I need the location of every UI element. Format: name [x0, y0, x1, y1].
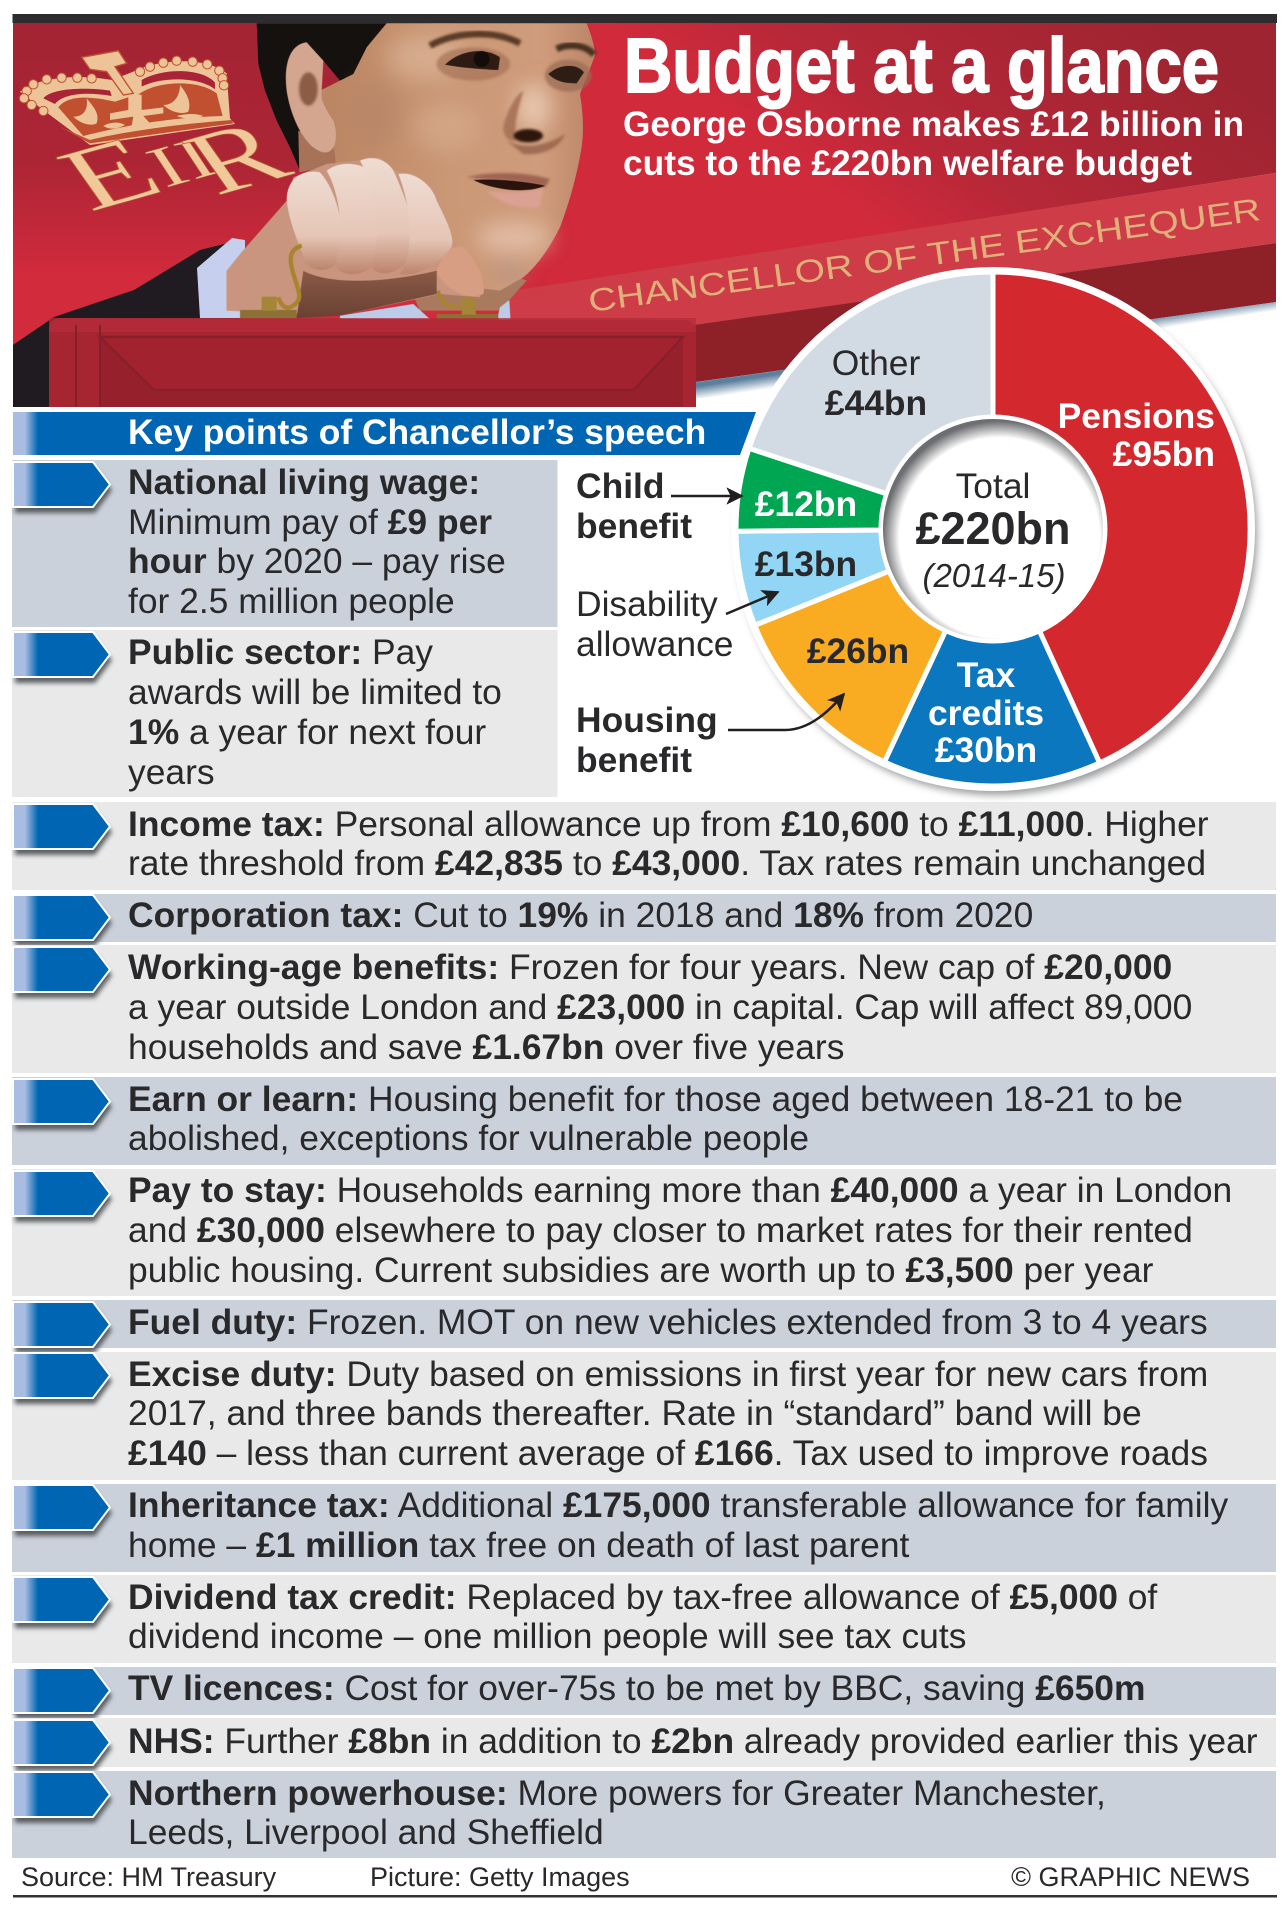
- label: pensions: Pensions: [1058, 396, 1215, 436]
- shirt cuff: [197, 238, 245, 318]
- arrow marker: [13, 1171, 112, 1222]
- label: pensions: [1058, 396, 1215, 474]
- bottom rule: [13, 1895, 1277, 1898]
- callout: housing benefit: [576, 694, 844, 780]
- George Osborne: face and hand: [227, 23, 595, 322]
- text: inheritance tax: Inheritance tax: Additional £175,000 transferable allowance for family: [128, 1485, 1228, 1525]
- panel: income tax: [12, 802, 1276, 890]
- donut chart: welfare budget: [731, 267, 1257, 795]
- segment: tax credits: [884, 630, 1100, 786]
- callout: child benefit: Child: [576, 466, 664, 506]
- panel: excise duty: [12, 1352, 1276, 1480]
- brows: [430, 34, 520, 46]
- arrow: child benefit: [671, 495, 742, 497]
- text: national living wage: [128, 462, 506, 621]
- label: tax credits: £30bn: [935, 730, 1037, 770]
- panel: working-age benefits: [12, 945, 1276, 1073]
- callout: disability allowance: [576, 584, 778, 664]
- label: housing value: £26bn: [807, 631, 909, 671]
- text: TV licences: TV licences: Cost for over-75s to be met by BBC, saving £650m: [128, 1668, 1145, 1708]
- red ministerial case: [49, 318, 696, 407]
- subhead: [623, 105, 1244, 183]
- label: tax credits: [928, 655, 1044, 770]
- panel: TV licences: [12, 1667, 1276, 1719]
- text: pay to stay: [128, 1170, 1232, 1290]
- text: public sector: years: [128, 752, 215, 792]
- segment: housing benefit: [755, 571, 946, 762]
- panel: inheritance tax: [12, 1484, 1276, 1572]
- callout: housing benefit: Housing: [576, 700, 718, 740]
- text: national living wage: hour by 2020 – pay rise: [128, 541, 506, 581]
- arrow marker: [13, 1772, 112, 1823]
- segment: disability allowance: [736, 530, 889, 625]
- text: inheritance tax: [128, 1485, 1228, 1565]
- panel: fuel duty: [12, 1300, 1276, 1353]
- ear: [286, 42, 336, 152]
- text: excise duty: [128, 1354, 1208, 1473]
- label: tax credits: credits: [928, 693, 1044, 733]
- label: tax credits: Tax: [957, 655, 1015, 695]
- fingers: [287, 172, 342, 270]
- arrow marker: [13, 632, 112, 683]
- text: excise duty: £140 – less than current average of £166. Tax used to improve roads: [128, 1433, 1208, 1473]
- callout: disability allowance: allowance: [576, 624, 733, 664]
- text: national living wage: National living wage:: [128, 462, 480, 502]
- text: northern powerhouse: Leeds, Liverpool and Sheffield: [128, 1812, 604, 1852]
- text: northern powerhouse: Northern powerhouse: More powers for Greater Manchester,: [128, 1773, 1106, 1813]
- text: public sector: 1% a year for next four: [128, 712, 486, 752]
- EIIR royal cipher: II: [134, 124, 229, 200]
- label: other: £44bn: [825, 383, 927, 423]
- arrow marker: [13, 462, 112, 513]
- centre hole: [883, 419, 1103, 639]
- arrow marker: [13, 1485, 112, 1536]
- box side: [680, 243, 1276, 382]
- arrow marker: [13, 895, 112, 946]
- text: fuel duty: Fuel duty: Frozen. MOT on new vehicles extended from 3 to 4 years: [128, 1302, 1208, 1342]
- text: excise duty: 2017, and three bands thereafter. Rate in “standard” band will be: [128, 1393, 1142, 1433]
- panel: northern powerhouse: [12, 1771, 1276, 1858]
- eyes: [445, 51, 500, 70]
- arrow marker: [13, 1353, 112, 1404]
- text: earn or learn: [128, 1079, 1183, 1158]
- arrow: housing benefit: [728, 694, 844, 730]
- text: income tax: rate threshold from £42,835 to £43,000. Tax rates remain unchanged: [128, 843, 1206, 883]
- label: pensions: £95bn: [1113, 434, 1215, 474]
- centre label: total: (2014-15): [922, 557, 1066, 594]
- face: [320, 23, 595, 291]
- red box background: [13, 23, 433, 345]
- box shadow: [690, 302, 1276, 405]
- footer credits: © GRAPHIC NEWS: [1011, 1862, 1250, 1892]
- text: northern powerhouse: [128, 1773, 1106, 1852]
- face modelling: [347, 34, 550, 275]
- arrow marker: [13, 1079, 112, 1130]
- label: other: Other: [832, 343, 920, 383]
- text: public sector: [128, 632, 502, 792]
- callout: disability allowance: Disability: [576, 584, 718, 624]
- suit jacket: [13, 240, 240, 407]
- palm shadow: [297, 271, 437, 318]
- text: pay to stay: Pay to stay: Households earning more than £40,000 a year in London: [128, 1170, 1232, 1210]
- centre label: total: [915, 466, 1071, 594]
- text: pay to stay: public housing. Current subsidies are worth up to £3,500 per year: [128, 1250, 1154, 1290]
- label: child benefit value: £12bn: [755, 484, 857, 524]
- text: working-age benefits: a year outside London and £23,000 in capital. Cap will affect 89,000: [128, 987, 1192, 1027]
- EIIR royal cipher: [55, 128, 296, 212]
- panel: pay to stay: [12, 1169, 1276, 1296]
- Chancellor of the Exchequer lettering: CHANCELLOR OF THE EXCHEQUER: [586, 191, 1263, 319]
- footer credits: [21, 1862, 1250, 1892]
- text: pay to stay: and £30,000 elsewhere to pay closer to market rates for their rented: [128, 1210, 1193, 1250]
- box lid edge: [505, 173, 1276, 325]
- subhead: cuts to the £220bn welfare budget: [623, 144, 1192, 183]
- panel: NHS: [12, 1718, 1276, 1771]
- text: excise duty: Excise duty: Duty based on emissions in first year for new cars from: [128, 1354, 1208, 1394]
- text: dividend tax credit: Dividend tax credit: Replaced by tax-free allowance of £5,000 of: [128, 1577, 1157, 1617]
- panel: public sector: [12, 630, 558, 797]
- neck: [298, 131, 340, 172]
- thumb: [437, 247, 484, 296]
- text: dividend tax credit: [128, 1577, 1157, 1656]
- panel: national living wage: [12, 460, 558, 627]
- nose shadow: [503, 91, 523, 141]
- eye sockets: [437, 47, 510, 81]
- text: national living wage: for 2.5 million people: [128, 581, 455, 621]
- shirt collar: [340, 304, 432, 321]
- arrow marker: [13, 1302, 112, 1353]
- text: corporation tax: Corporation tax: Cut to 19% in 2018 and 18% from 2020: [128, 895, 1033, 935]
- text: dividend tax credit: dividend income – one million people will see tax cuts: [128, 1616, 966, 1656]
- centre label: total: Total: [956, 466, 1030, 506]
- callout: child benefit: [576, 466, 742, 546]
- arrow: disability allowance: [726, 592, 778, 614]
- EIIR royal cipher: E: [39, 118, 181, 230]
- label: other: [825, 343, 927, 423]
- arrow marker: [13, 1668, 112, 1719]
- callout: housing benefit: benefit: [576, 740, 692, 780]
- arrow marker: [13, 1577, 112, 1628]
- royal crown emblem: [19, 51, 235, 145]
- text: public sector: awards will be limited to: [128, 672, 502, 712]
- arrow marker: [13, 947, 112, 998]
- text: working-age benefits: Working-age benefits: Frozen for four years. New cap of £20,000: [128, 947, 1172, 987]
- mouth: [467, 173, 550, 187]
- panel: corporation tax: [12, 894, 1276, 946]
- footer credits: Source: HM Treasury: [21, 1862, 277, 1892]
- centre label: total: £220bn: [915, 503, 1071, 554]
- arrow marker: [13, 804, 112, 855]
- text: NHS: NHS: Further £8bn in addition to £2bn already provided earlier this year: [128, 1721, 1258, 1761]
- text: earn or learn: abolished, exceptions for vulnerable people: [128, 1118, 809, 1158]
- segment: pensions: [993, 272, 1250, 763]
- arrow marker: [13, 1720, 112, 1771]
- text: national living wage: Minimum pay of £9 per: [128, 502, 492, 542]
- text: income tax: Income tax: Personal allowance up from £10,600 to £11,000. Higher: [128, 804, 1209, 844]
- header photo: budget box, Chancellor and red case: [13, 23, 1276, 407]
- text: earn or learn: Earn or learn: Housing benefit for those aged between 18-21 to be: [128, 1079, 1183, 1119]
- text: public sector: Public sector: Pay: [128, 632, 433, 672]
- text: income tax: [128, 804, 1209, 883]
- segment: child benefit: [736, 448, 887, 531]
- footer credits: Picture: Getty Images: [370, 1862, 630, 1892]
- label: disability value: £13bn: [755, 544, 857, 584]
- panel: earn or learn: [12, 1077, 1276, 1165]
- text: working-age benefits: households and save £1.67bn over five years: [128, 1027, 844, 1067]
- callout: child benefit: benefit: [576, 506, 692, 546]
- subhead: George Osborne makes £12 billion in: [623, 105, 1244, 144]
- segment: other: [749, 272, 993, 494]
- case handles: [278, 246, 302, 308]
- section header: key points: Key points of Chancellor’s speech: [128, 412, 706, 452]
- EIIR royal cipher: R: [165, 101, 309, 214]
- text: inheritance tax: home – £1 million tax free on death of last parent: [128, 1525, 910, 1565]
- text: working-age benefits: [128, 947, 1192, 1067]
- hand: [227, 157, 485, 316]
- panel: dividend tax credit: [12, 1575, 1276, 1663]
- hair: [257, 23, 387, 171]
- top rule: [12, 14, 1277, 23]
